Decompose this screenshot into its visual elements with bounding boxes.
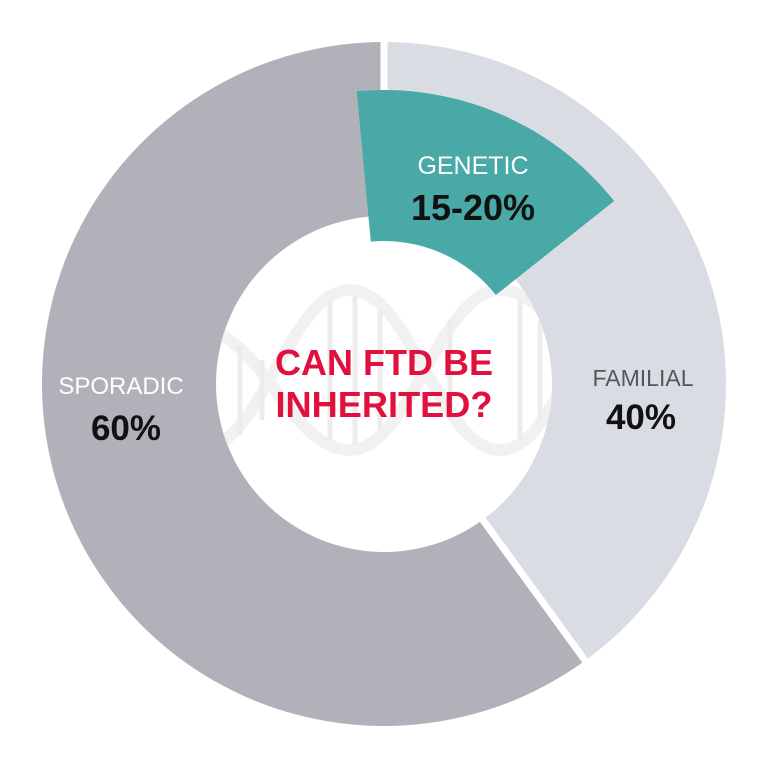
- label: genetic: GENETIC: [417, 152, 529, 180]
- label: familial: FAMILIAL: [593, 365, 694, 391]
- label: familial: [593, 365, 694, 437]
- label: genetic: [411, 152, 535, 228]
- title: CAN FTD BE: [275, 342, 493, 383]
- segment: familial: [384, 42, 726, 661]
- icon: dna helix: [200, 290, 580, 450]
- label: sporadic: SPORADIC: [58, 373, 184, 400]
- title: INHERITED?: [276, 384, 492, 425]
- label: genetic: 15-20%: [411, 187, 535, 228]
- segment: sporadic: [42, 42, 585, 726]
- label: sporadic: 60%: [91, 409, 161, 448]
- label: sporadic: [58, 373, 184, 448]
- segment: genetic: [357, 90, 614, 295]
- label: familial: 40%: [606, 398, 676, 437]
- title: [275, 342, 493, 425]
- center circle: [216, 216, 552, 552]
